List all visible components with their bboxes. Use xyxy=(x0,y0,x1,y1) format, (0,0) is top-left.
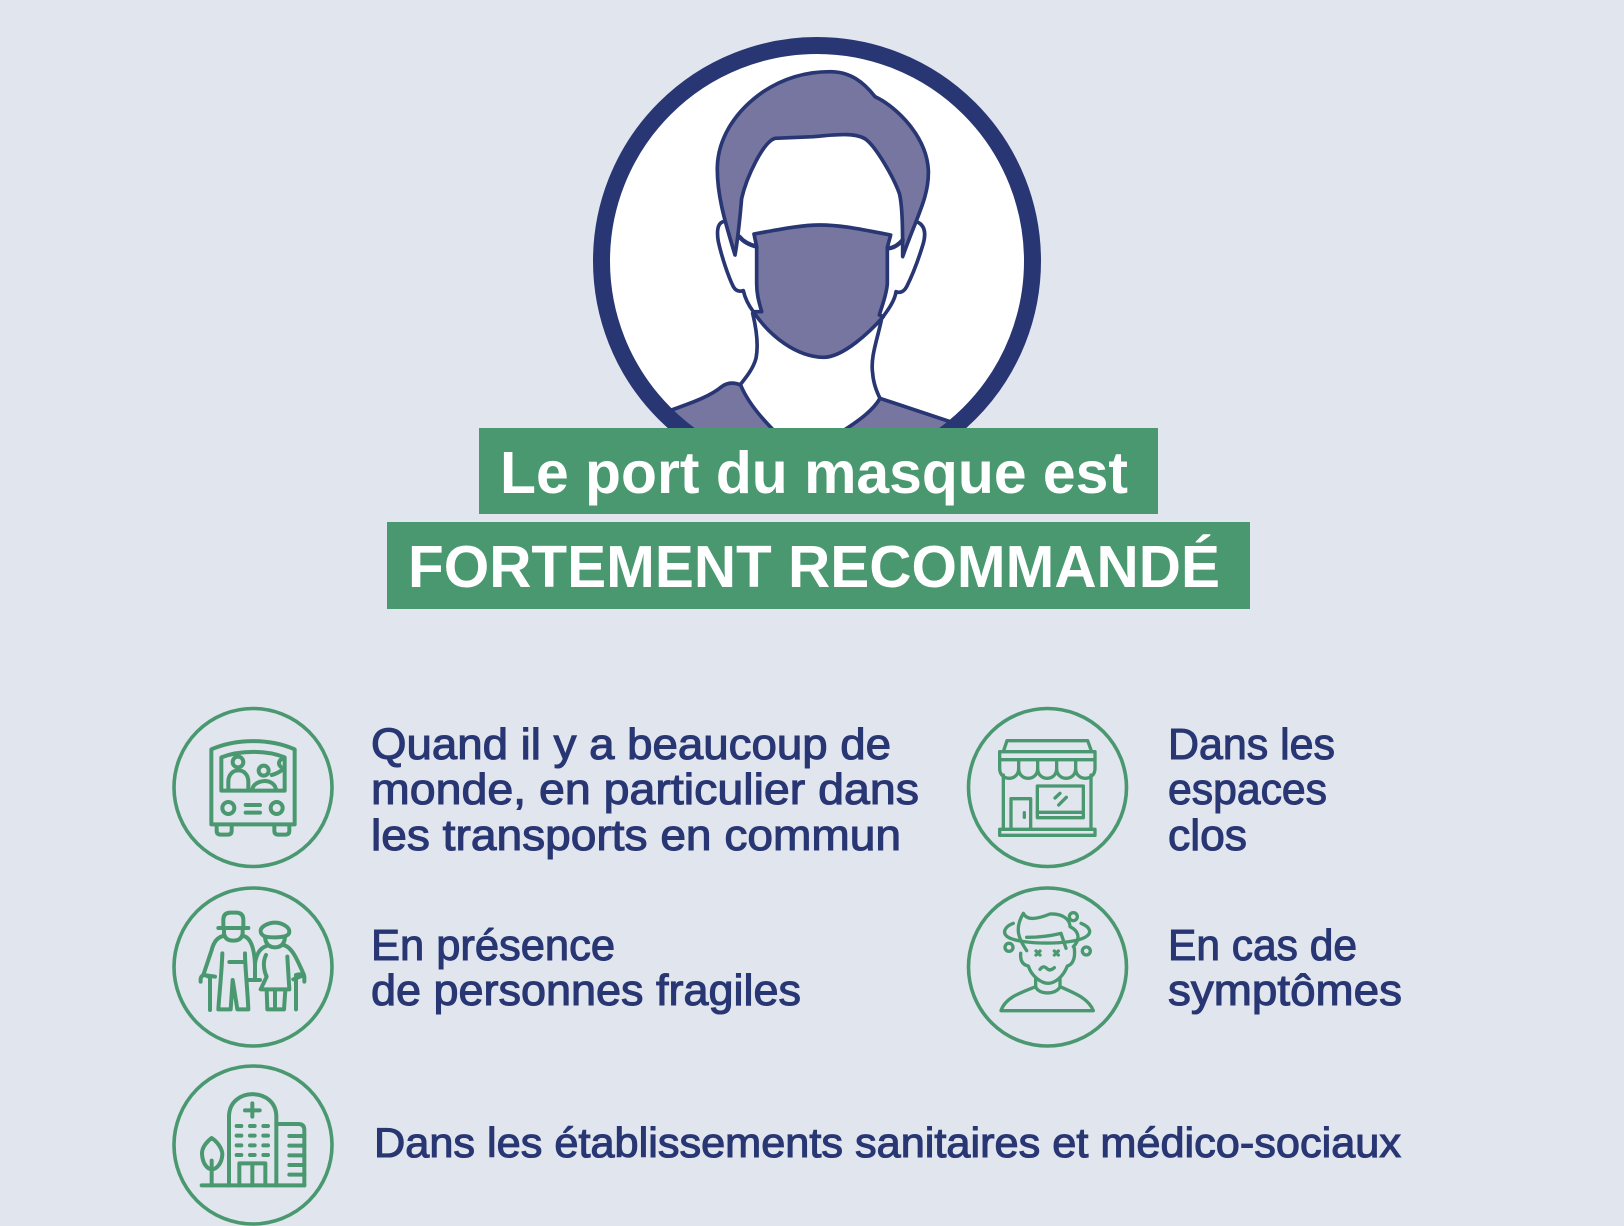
text: in case of symptoms xyxy=(1168,921,1402,1015)
text: in case of symptoms: symptômes xyxy=(1168,966,1402,1015)
icon: elderly couple xyxy=(174,888,332,1046)
icon: bus with passengers xyxy=(174,708,332,866)
icon: hospital xyxy=(174,1066,332,1224)
text: crowds and public transport: Quand il y a beaucoup de xyxy=(371,720,891,769)
text: vulnerable people: de personnes fragiles xyxy=(371,966,801,1015)
portrait: person wearing a mask xyxy=(602,46,1032,476)
text: crowds and public transport: monde, en particulier dans xyxy=(371,765,919,814)
text: crowds and public transport xyxy=(371,720,919,860)
text: vulnerable people xyxy=(371,921,801,1015)
title banner: line 1: Le port du masque est xyxy=(500,440,1128,506)
text: vulnerable people: En présence xyxy=(371,921,615,970)
icon: shop xyxy=(968,708,1126,866)
text: in case of symptoms: En cas de xyxy=(1168,921,1357,970)
text: enclosed spaces: clos xyxy=(1168,811,1247,860)
text: health and social care establishments: Dans les établissements sanitaires et médico-sociaux xyxy=(374,1119,1401,1166)
text: crowds and public transport: les transports en commun xyxy=(371,811,901,860)
title banner: line 2: FORTEMENT RECOMMANDÉ xyxy=(408,534,1220,600)
icon: dizzy person with symptoms xyxy=(968,888,1126,1046)
text: enclosed spaces xyxy=(1168,720,1335,860)
text: enclosed spaces: Dans les xyxy=(1168,720,1335,769)
text: enclosed spaces: espaces xyxy=(1168,765,1327,814)
